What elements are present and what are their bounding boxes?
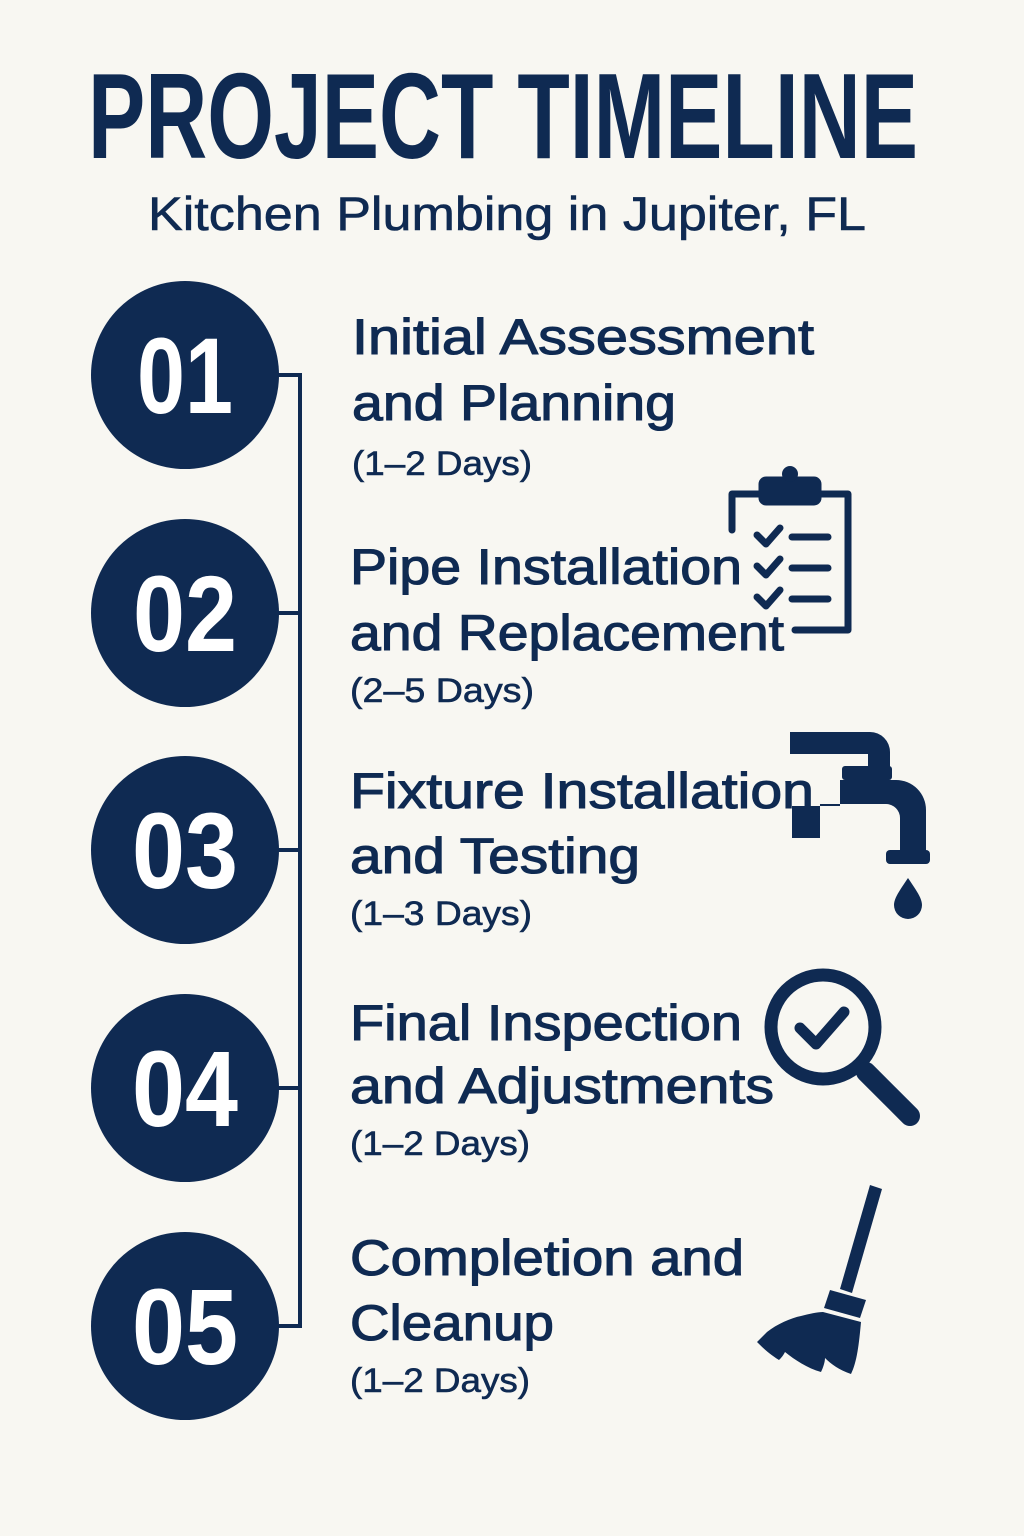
step 04: (1–2 Days) (350, 1125, 530, 1163)
timeline connector line (278, 375, 300, 1326)
step 01: (1–2 Days) (352, 445, 532, 483)
icon: broom (757, 1185, 882, 1374)
step 04 (91, 994, 774, 1182)
step 02: Pipe Installation (350, 539, 742, 595)
step 03: Fixture Installation (350, 763, 814, 819)
step 03: 03 (132, 790, 238, 911)
step 05: Completion and (350, 1230, 744, 1286)
step 03: (1–3 Days) (350, 895, 532, 933)
step 01: 01 (137, 315, 233, 436)
step 05 (91, 1230, 744, 1420)
step 02: (2–5 Days) (350, 672, 534, 710)
step 02 (91, 519, 784, 710)
step 02: and Replacement (350, 605, 784, 661)
step 04: and Adjustments (350, 1058, 774, 1114)
subtitle: Kitchen Plumbing in Jupiter, FL (148, 187, 866, 240)
step 05: (1–2 Days) (350, 1362, 530, 1400)
icon: clipboard (732, 466, 848, 630)
step 01: Initial Assessment (352, 309, 814, 365)
step 04: Final Inspection (350, 995, 742, 1051)
step 01: and Planning (352, 375, 676, 431)
step 04: 04 (132, 1028, 238, 1149)
icon: faucet (790, 732, 930, 919)
step 01 (91, 281, 814, 483)
step 02: 02 (133, 553, 237, 674)
step 03: and Testing (350, 828, 640, 884)
step 03 (91, 756, 814, 944)
step 05: Cleanup (350, 1295, 554, 1351)
icon: magnifier with check (771, 975, 910, 1116)
step 05: 05 (132, 1266, 238, 1387)
